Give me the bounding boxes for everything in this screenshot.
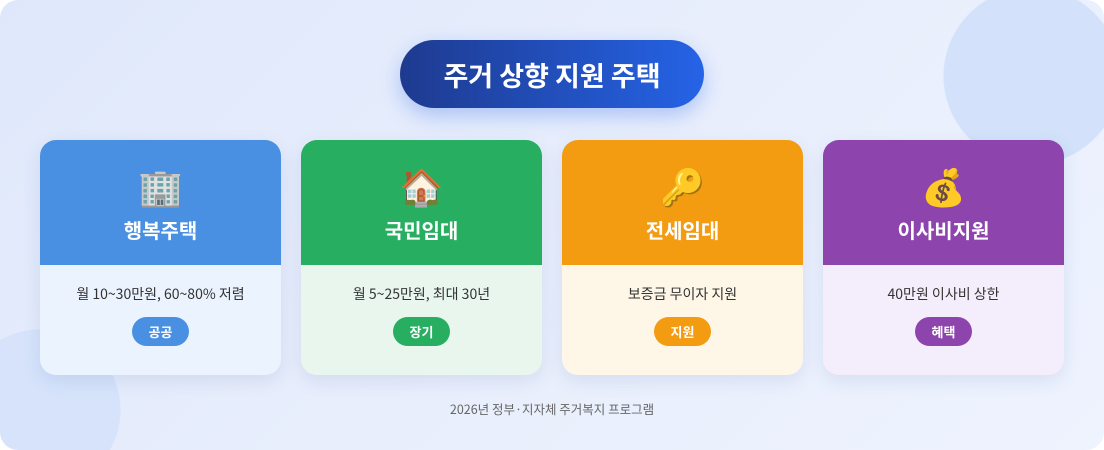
icon: key: 🔑 — [660, 159, 705, 211]
icon: house: 🏠 — [399, 159, 444, 211]
panel: 행복주택: 행복주택 — [124, 215, 197, 244]
panel: 이사비지원: 혜택 — [932, 322, 955, 341]
panel: 이사비지원 — [823, 140, 1064, 375]
panel: 국민임대: 월 5~25만원, 최대 30년 — [353, 284, 490, 304]
panel: 국민임대 — [301, 140, 542, 375]
panel: 국민임대: 국민임대 — [385, 215, 458, 244]
icon: money bag: 💰 — [921, 159, 966, 211]
panel: 전세임대 — [562, 140, 803, 375]
icon: building: 🏢 — [138, 159, 183, 211]
panel: 행복주택: 공공 — [149, 322, 172, 341]
panel: 전세임대: 보증금 무이자 지원 — [628, 284, 737, 304]
panel: 행복주택 — [40, 140, 281, 375]
panel: 국민임대: 장기 — [410, 322, 433, 341]
panel: 행복주택: 월 10~30만원, 60~80% 저렴 — [76, 284, 245, 304]
panel: 전세임대: 전세임대 — [646, 215, 719, 244]
footer note: 2026년 정부·지자체 주거복지 프로그램 — [450, 399, 654, 418]
panel: 전세임대: 지원 — [671, 322, 694, 341]
panel: 이사비지원: 40만원 이사비 상한 — [888, 284, 999, 304]
title: 주거 상향 지원 주택 — [443, 54, 661, 94]
panel: 이사비지원: 이사비지원 — [898, 215, 990, 244]
title — [400, 40, 704, 108]
